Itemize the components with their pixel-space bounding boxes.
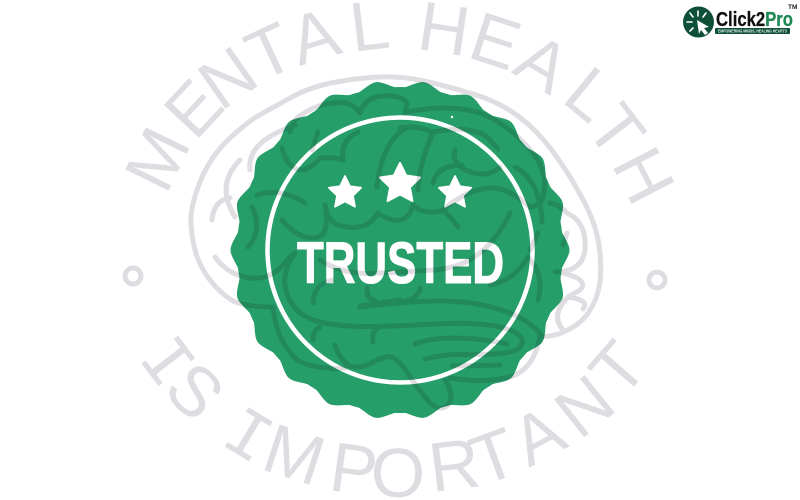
left star [329, 176, 361, 207]
logo icon: cursor with rays [683, 6, 714, 38]
inner ring [268, 118, 532, 382]
right decorative dot [649, 272, 665, 288]
right star [439, 176, 471, 207]
TRUSTED label: TRUSTED [297, 231, 504, 296]
logo wordmark: Click2Pro [716, 9, 793, 31]
brand logo [683, 4, 797, 38]
scalloped seal [224, 73, 576, 427]
centre star [380, 163, 420, 201]
left decorative dot [125, 268, 141, 284]
trademark: TM [788, 4, 797, 11]
trusted badge [224, 73, 576, 427]
brain line illustration [191, 77, 601, 408]
tiny white speck [451, 116, 453, 118]
three stars [329, 163, 471, 207]
